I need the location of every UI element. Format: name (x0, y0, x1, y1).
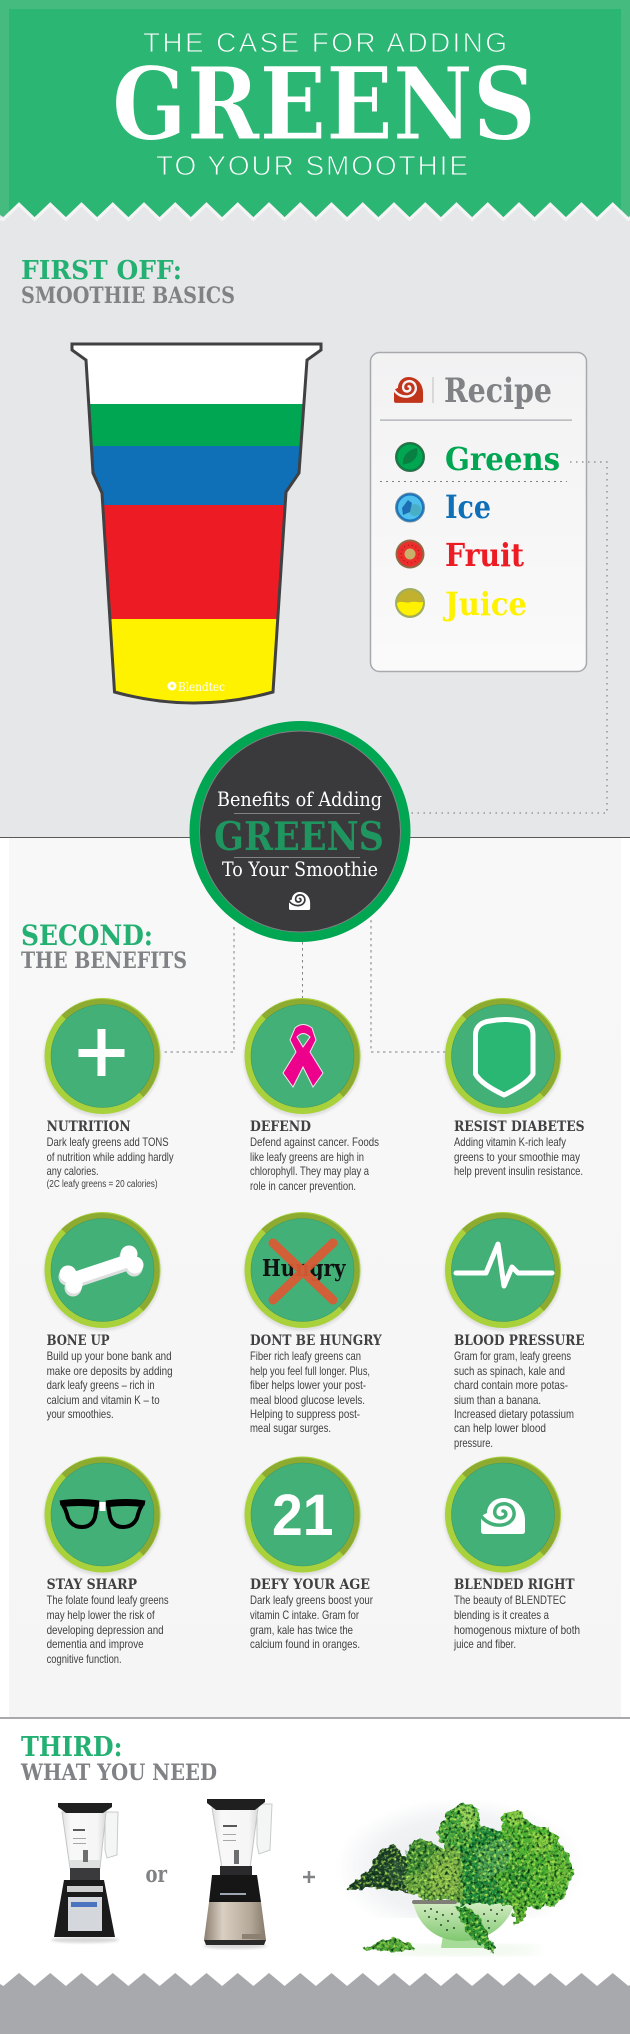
body text: Dark leafy greens add TONS (47, 1135, 169, 1149)
smoothie cup diagram (60, 340, 330, 709)
body text: your smoothies. (47, 1407, 114, 1421)
body text: blending is it creates a (454, 1608, 549, 1622)
leaves (347, 1803, 572, 1952)
body text: help you feel full longer. Plus, (250, 1364, 370, 1378)
heading: third: THIRD: (21, 1732, 122, 1763)
body text: any calories. (47, 1164, 99, 1178)
heading: second: SECOND: (21, 919, 153, 952)
ingredient: fruit: Fruit (445, 536, 524, 574)
body text (250, 1593, 373, 1651)
connector: nutrition (161, 927, 234, 1052)
body text: Adding vitamin K-rich leafy (454, 1135, 566, 1149)
header line 1: THE CASE FOR ADDING (143, 27, 507, 58)
connector: greens to benefits badge (410, 462, 607, 813)
recipe title: Recipe (444, 371, 552, 411)
body text: pressure. (454, 1436, 493, 1450)
body text (454, 1135, 583, 1178)
body text: The folate found leafy greens (47, 1593, 169, 1607)
benefits badge (190, 721, 410, 942)
heading: DEFEND (250, 1119, 311, 1135)
body text: fiber helps lower your post- (250, 1378, 366, 1392)
body text: developing depression and (47, 1623, 164, 1637)
heading: third (20, 1732, 217, 1786)
heading: BLOOD PRESSURE (454, 1333, 585, 1349)
icon: hungry crossed out badge: Hungry (262, 1255, 346, 1282)
icon: pink ribbon badge (244, 998, 362, 1117)
benefit: nutrition (44, 998, 174, 1190)
icon: 21 badge (244, 1456, 362, 1576)
ingredient: greens (396, 440, 560, 478)
body text: The beauty of BLENDTEC (454, 1593, 566, 1607)
body text: Dark leafy greens boost your (250, 1593, 373, 1607)
heading: first off: SMOOTHIE BASICS (21, 283, 235, 309)
body text: of nutrition while adding hardly (47, 1150, 174, 1164)
body text: greens to your smoothie may (454, 1150, 580, 1164)
connector: resist diabetes (371, 920, 446, 1052)
heading: DONT BE HUNGRY (250, 1333, 383, 1349)
heading: BLENDED RIGHT (454, 1577, 575, 1593)
body text: calcium found in oranges. (250, 1637, 360, 1651)
header banner (0, 0, 630, 220)
colander (412, 1900, 515, 1948)
body text: Defend against cancer. Foods (250, 1135, 379, 1149)
body text: may help lower the risk of (47, 1608, 155, 1622)
body text (47, 1593, 169, 1666)
footer zigzag band (0, 1973, 630, 2034)
ingredient: greens: Greens (445, 440, 560, 478)
benefits section background (0, 838, 630, 1718)
benefit: dont be hungry (244, 1212, 383, 1435)
benefit: blood pressure (444, 1212, 585, 1450)
body text: can help lower blood (454, 1421, 546, 1435)
body text (454, 1349, 574, 1450)
body text: cognitive function. (47, 1652, 122, 1666)
heading: second: THE BENEFITS (21, 948, 187, 974)
icon: hungry crossed out badge (244, 1212, 362, 1331)
header title GREENS: GREENS (112, 45, 536, 163)
heading: RESIST DIABETES (454, 1119, 585, 1135)
section divider: basics to benefits (0, 837, 630, 838)
ingredient: fruit (396, 536, 524, 574)
heading: BONE UP (47, 1333, 110, 1349)
header line 3: TO YOUR SMOOTHIE (156, 150, 468, 181)
body text: Gram for gram, leafy greens (454, 1349, 571, 1363)
body text: Build up your bone bank and (47, 1349, 172, 1363)
body text: Increased dietary potassium (454, 1407, 574, 1421)
body text: vitamin C intake. Gram for (250, 1608, 359, 1622)
ingredient: juice (395, 585, 527, 623)
photo: silver blender (203, 1799, 272, 1949)
heading: third: WHAT YOU NEED (20, 1760, 217, 1786)
ingredient: ice (396, 488, 491, 526)
ingredient: juice: Juice (442, 585, 527, 623)
body text: chard contain more potas- (454, 1378, 568, 1392)
body text: meal sugar surges. (250, 1421, 331, 1435)
benefit: resist diabetes (444, 998, 585, 1178)
body text (47, 1349, 173, 1421)
text: or: or (146, 1861, 168, 1888)
heading: first off: FIRST OFF: (21, 256, 182, 286)
icon: plus sign (303, 1871, 315, 1883)
body text: gram, kale has twice the (250, 1623, 353, 1637)
icon: 21 badge: 21 (272, 1483, 334, 1548)
photo: greens in colander (335, 1798, 585, 1963)
body text (250, 1349, 370, 1435)
panel: recipe (370, 352, 586, 672)
heading: STAY SHARP (47, 1577, 137, 1593)
ingredient: ice: Ice (445, 488, 491, 526)
body text: dementia and improve (47, 1637, 144, 1651)
body text: (2C leafy greens = 20 calories) (47, 1179, 158, 1190)
body text: such as spinach, kale and (454, 1364, 565, 1378)
benefit: stay sharp (44, 1456, 169, 1666)
body text (453, 1593, 580, 1651)
heading: first off (21, 256, 235, 309)
badge line 1: Benefits of Adding (217, 787, 382, 811)
body text: like leafy greens are high in (250, 1150, 364, 1164)
body text: role in cancer prevention. (250, 1179, 356, 1193)
cup logo: Blendtec (178, 680, 225, 694)
body text (250, 1135, 379, 1193)
badge line 3: To Your Smoothie (222, 857, 378, 881)
benefit: blended right (444, 1456, 580, 1651)
body text: juice and fiber. (453, 1637, 516, 1651)
heading: second (21, 919, 187, 974)
badge title: GREENS (214, 814, 384, 860)
body text: meal blood glucose levels. (250, 1393, 365, 1407)
heading: DEFY YOUR AGE (250, 1577, 370, 1593)
icon: swirl badge (444, 1456, 562, 1576)
icon: red swirl logo (393, 377, 423, 403)
body text: make ore deposits by adding (47, 1364, 173, 1378)
benefit: bone up (44, 1212, 173, 1421)
body text (47, 1135, 174, 1190)
body text: help prevent insulin resistance. (454, 1164, 583, 1178)
body text: Fiber rich leafy greens can (250, 1349, 361, 1363)
body text: chlorophyll. They may play a (250, 1164, 369, 1178)
page background: basics section (0, 200, 630, 837)
icon: white swirl (288, 892, 310, 910)
connector: defend (302, 942, 304, 998)
body text: Helping to suppress post- (250, 1407, 360, 1421)
photo: black blender (51, 1803, 119, 1943)
section divider: benefits to needs (0, 1717, 630, 1719)
body text: dark leafy greens – rich in (47, 1378, 155, 1392)
icon: bone badge (44, 1212, 162, 1331)
icon: shield badge (444, 998, 562, 1117)
icon: plus badge (44, 998, 162, 1117)
benefit: defy your age (244, 1456, 373, 1651)
body text: sium than a banana. (454, 1393, 541, 1407)
icon: glasses badge (44, 1456, 162, 1576)
body text: calcium and vitamin K – to (47, 1393, 160, 1407)
benefit: defend (244, 998, 379, 1193)
icon: pulse badge (444, 1212, 562, 1331)
heading: NUTRITION (47, 1119, 131, 1135)
body text: homogenous mixture of both (454, 1623, 580, 1637)
